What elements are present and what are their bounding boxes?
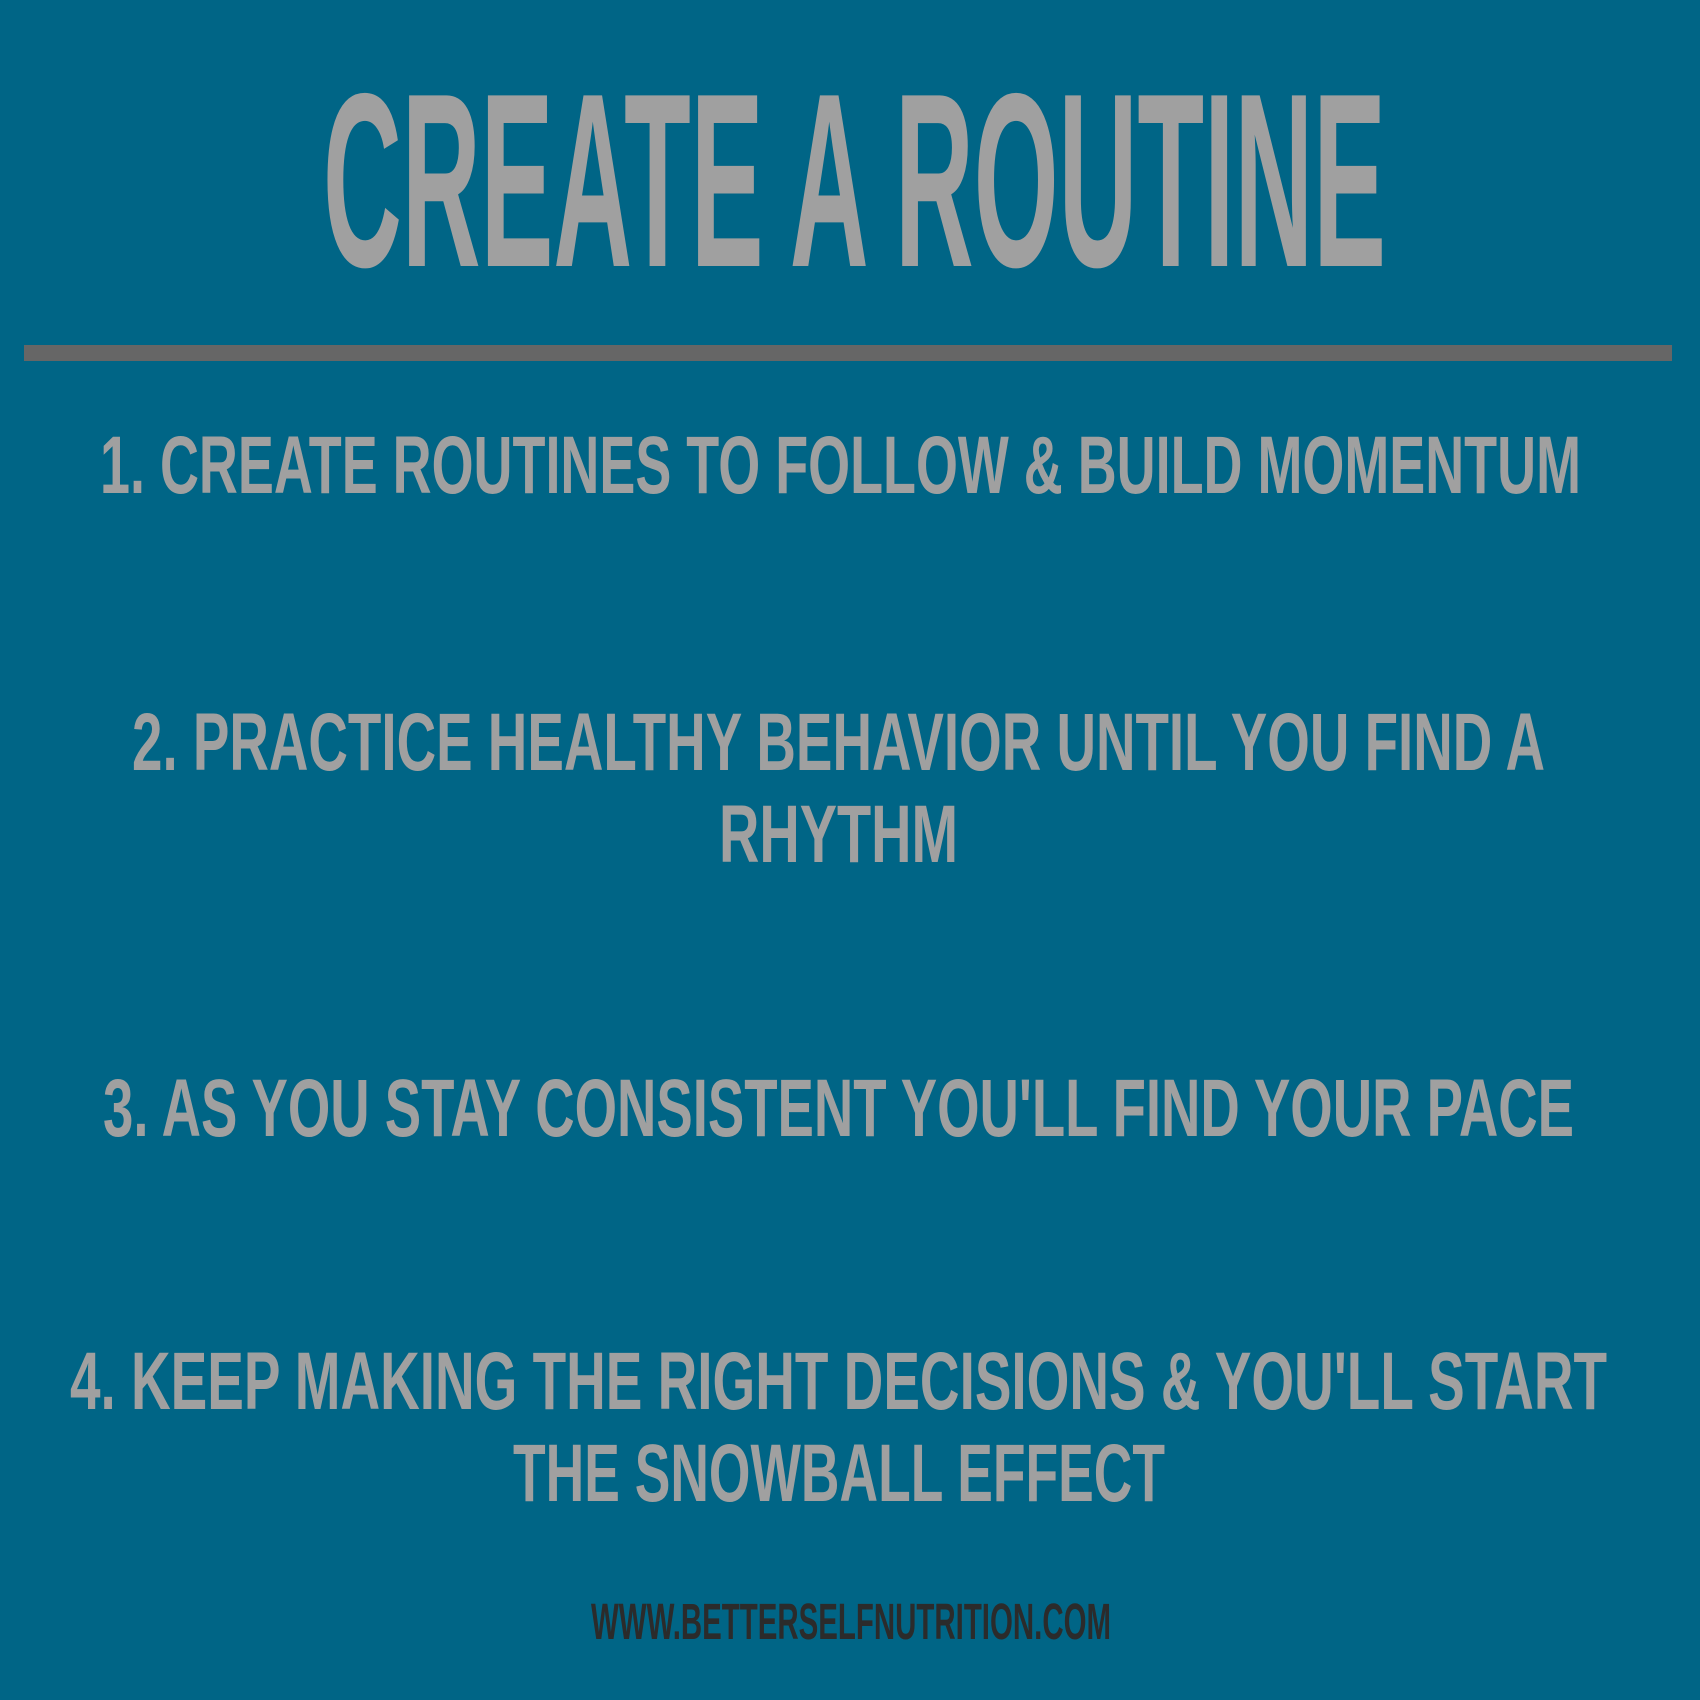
item 4: THE SNOWBALL EFFECT — [513, 1428, 1165, 1519]
item 4 — [70, 1336, 1607, 1519]
footer url: WWW.BETTERSELFNUTRITION.COM — [591, 1593, 1111, 1650]
item 2 — [132, 697, 1545, 880]
item 2: RHYTHM — [719, 789, 958, 880]
